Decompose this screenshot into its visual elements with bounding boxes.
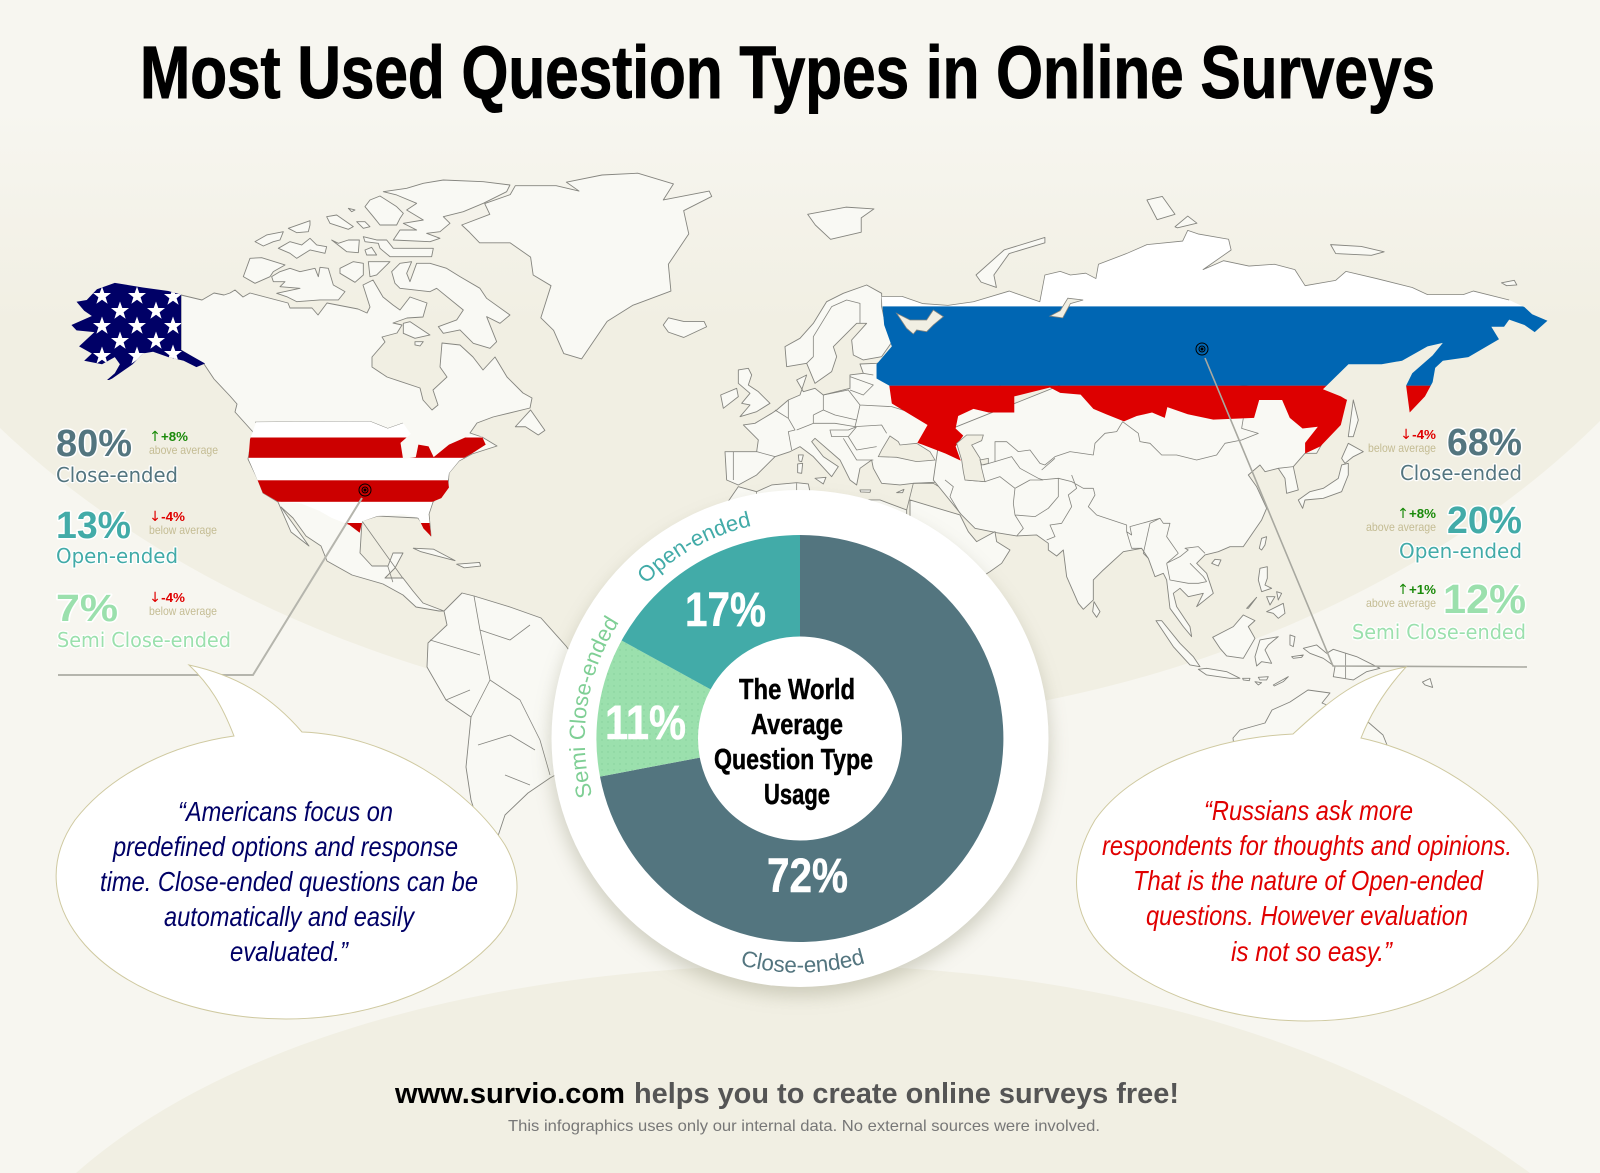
stat: usa close-ended <box>56 423 218 487</box>
stat: usa semi close-ended: 7% <box>56 588 118 630</box>
arctic islands <box>243 180 510 348</box>
callout: usa <box>56 665 517 1019</box>
stat: usa open-ended: Open-ended <box>56 544 178 568</box>
arc label: open-ended: Open-ended <box>638 510 750 581</box>
australia <box>1233 690 1387 800</box>
stat: russia open-ended: 20% <box>1447 500 1522 542</box>
arabia <box>910 500 1010 580</box>
stat: russia semi close-ended: Semi Close-ended <box>1352 620 1526 644</box>
quote text: usa: automatically and easily <box>164 901 416 932</box>
russia flag region <box>876 230 1548 482</box>
greenland <box>462 173 712 359</box>
alaska flag region <box>72 282 205 380</box>
north america landmass <box>181 280 532 611</box>
stat: usa open-ended <box>56 505 217 568</box>
center label: Question Type <box>714 744 873 776</box>
stat: russia close-ended: below average <box>1368 441 1436 455</box>
central america borders <box>255 421 403 582</box>
center label: Average <box>751 709 843 741</box>
stats panel: russia <box>1352 422 1526 644</box>
icon: target usa <box>359 484 371 496</box>
newfoundland and caribbean <box>413 318 707 568</box>
value: 72%: 72% <box>767 850 848 903</box>
stat: russia close-ended: 68% <box>1447 422 1522 464</box>
world map <box>60 173 1560 860</box>
stat: russia open-ended: Open-ended <box>1399 539 1522 563</box>
north africa <box>720 483 907 560</box>
stat: russia open-ended: ↑+8% <box>1397 506 1436 522</box>
footer headline <box>394 1078 1179 1110</box>
stats panel: usa <box>56 423 231 652</box>
stat: russia close-ended: Close-ended <box>1400 461 1522 485</box>
stat: usa open-ended: below average <box>149 523 217 537</box>
stat: usa close-ended: above average <box>149 443 218 457</box>
stat: russia semi close-ended: above average <box>1366 596 1436 610</box>
stat: russia semi close-ended: ↑+1% <box>1397 582 1436 598</box>
leader line: usa <box>58 498 362 675</box>
slice: open-ended 17% <box>622 535 800 689</box>
asian islands <box>1093 400 1380 686</box>
callout: russia <box>1077 667 1538 1021</box>
stat: russia open-ended: above average <box>1366 520 1436 534</box>
footer note: This infographics uses only our internal data. No external sources were involved. <box>508 1118 1100 1135</box>
europe borders <box>733 300 960 510</box>
quote text: usa: evaluated.” <box>230 936 349 967</box>
center label: Usage <box>764 779 830 811</box>
british isles and mediterranean islands <box>721 368 904 493</box>
quote text: russia: respondents for thoughts and opinions. <box>1102 830 1512 861</box>
stat: usa close-ended: 80% <box>56 423 132 465</box>
stat: usa open-ended: ↓-4% <box>149 509 185 525</box>
stat: usa open-ended: 13% <box>56 505 131 547</box>
stat: usa semi close-ended: Semi Close-ended <box>57 628 231 652</box>
stat: usa close-ended: ↑+8% <box>149 429 188 445</box>
caspian and aral seas <box>957 435 985 482</box>
scandinavia <box>785 285 893 383</box>
quote text: russia: “Russians ask more <box>1204 795 1413 826</box>
value: 17%: 17% <box>685 584 766 637</box>
stat: usa semi close-ended: ↓-4% <box>149 590 185 606</box>
russia arctic islands <box>808 196 1517 687</box>
slice: close-ended 72% <box>600 535 1003 942</box>
arc label: semi close-ended: Semi Close-ended <box>569 615 618 798</box>
stat: usa semi close-ended: below average <box>149 604 217 618</box>
stat: usa close-ended: Close-ended <box>56 463 178 487</box>
slice: semi close-ended 11% <box>596 640 711 777</box>
quote text: russia: is not so easy.” <box>1231 936 1393 967</box>
usa flag region <box>248 421 486 536</box>
stat: usa semi close-ended <box>56 588 231 652</box>
icon: target russia <box>1196 343 1208 355</box>
stat: russia semi close-ended <box>1352 576 1526 644</box>
quote text: russia: questions. However evaluation <box>1146 900 1468 931</box>
stat: russia open-ended <box>1366 500 1522 563</box>
arc label: close-ended: Close-ended <box>742 948 864 973</box>
leader line: russia <box>1205 358 1527 667</box>
center label: The World <box>739 674 855 706</box>
africa borders <box>755 483 797 513</box>
asian borders <box>945 418 1293 583</box>
south america borders <box>430 596 550 785</box>
stat: russia semi close-ended: 12% <box>1443 576 1526 622</box>
donut chart <box>542 490 1058 1004</box>
stat: russia close-ended <box>1368 422 1522 485</box>
europe mainland <box>725 360 1000 485</box>
footer headline: helps you to create online surveys free! <box>634 1078 1179 1110</box>
center label <box>714 674 873 811</box>
quote text: usa: time. Close-ended questions can be <box>100 866 478 897</box>
black sea <box>878 436 935 462</box>
footer headline: www.survio.com <box>394 1078 625 1110</box>
quote text: russia <box>1102 795 1512 967</box>
quote text: usa: “Americans focus on <box>178 796 393 827</box>
asia mainland <box>933 367 1347 637</box>
south america <box>427 593 605 860</box>
stat: russia close-ended: ↓-4% <box>1400 427 1436 443</box>
value: 11%: 11% <box>605 697 686 750</box>
quote text: usa <box>100 796 478 967</box>
quote text: russia: That is the nature of Open-ended <box>1133 865 1484 896</box>
quote text: usa: predefined options and response <box>112 831 458 862</box>
